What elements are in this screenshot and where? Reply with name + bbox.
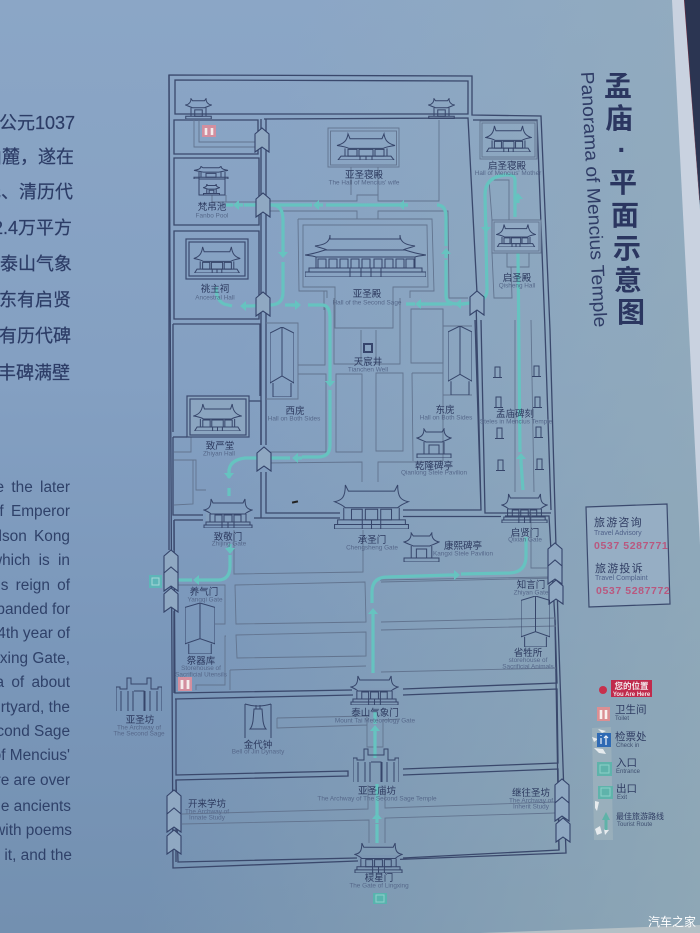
- Bell of Jin Dynasty: 金代钟: [244, 739, 272, 751]
- hall: Mencius' wife: The Hall of Mencius' wife: [329, 180, 400, 186]
- hall: Qisheng Hall: 启圣殿: [503, 272, 532, 284]
- left intro text: Chinese: 泰山气象: [0, 254, 72, 274]
- Archway of the Second Sage: The Second Sage: [113, 730, 165, 738]
- Archway of Innate Study: Innate Study: [189, 814, 226, 822]
- legend: check in: [597, 730, 647, 749]
- right edge: white frame strip and dark gap: [480, 0, 700, 933]
- legend: toilet: [597, 703, 646, 722]
- top corner pavilions: [186, 99, 454, 119]
- legend: tourist route: Tourist Route: [617, 822, 653, 828]
- Qianlong Stele Pavilion: [401, 429, 467, 476]
- legend: exit: Exit: [617, 795, 627, 801]
- panel: travel contact box: Travel Complaint: [595, 575, 648, 582]
- thin courtyard lines: [174, 120, 558, 843]
- Fanbo Pool: 梵帛池: [198, 201, 227, 213]
- Zhiyan Gate: [514, 579, 549, 596]
- legend: exit: [598, 782, 637, 801]
- panel: travel contact box: 0537 5287772: [596, 585, 670, 597]
- hall: Mencius' wife: [328, 128, 400, 186]
- hall: Qisheng Hall: [492, 220, 541, 290]
- legend: [592, 680, 664, 840]
- hall: Ancestral Hall: Ancestral Hall: [195, 294, 235, 302]
- Archway of the Second Sage: [113, 678, 165, 738]
- Bell of Jin Dynasty: [232, 704, 285, 756]
- watermark: 汽车之家: [648, 914, 696, 929]
- Steles in Mencius Temple: Steles in Mencius Temple: [480, 418, 553, 426]
- east side hall: [420, 326, 472, 422]
- Kangxi Stele Pavilion: Kangxi Stele Pavilion: [433, 550, 493, 558]
- Archway of Innate Study: [185, 798, 229, 822]
- legend: check in: 检票处: [615, 730, 647, 743]
- Yangqi Gate: [187, 586, 223, 604]
- Archway of the Second Sage: The Archway of: [117, 724, 161, 732]
- Kangxi Stele Pavilion: 康熙碑亭: [444, 540, 482, 552]
- Gate of Lingxing: The Gate of Lingxing: [349, 882, 409, 890]
- Zhijing Gate: [204, 499, 252, 548]
- Zhiyan Gate: Zhiyan Gate: [514, 590, 549, 596]
- Qixian Gate: [502, 494, 547, 544]
- panel: travel contact box: 旅游投诉: [595, 561, 644, 575]
- Qianlong Stele Pavilion: Qianlong Stele Pavilion: [401, 470, 467, 476]
- title: vertical Chinese: 示: [613, 233, 641, 264]
- Archway of Innate Study: The Archway of: [185, 808, 229, 816]
- panel: travel contact box: [586, 504, 670, 607]
- Zhijing Gate: 致敬门: [214, 531, 242, 543]
- Storehouse of Sacrificial Utensils: [175, 603, 227, 678]
- Gate of Lingxing: 棂星门: [365, 872, 393, 884]
- Archway of Innate Study: 开来学坊: [188, 798, 226, 810]
- legend: toilet: Toilet: [615, 716, 629, 722]
- toilet icon: south: [178, 677, 192, 691]
- legend: tourist route: [602, 811, 664, 830]
- left intro text: Chinese: 丰碑满壁: [0, 363, 70, 383]
- left intro text: Chinese: 公元1037: [0, 113, 75, 133]
- Storehouse of Sacrificial Animals: storehouse of: [509, 657, 548, 664]
- Archway of Inherit Study: The Archway of: [509, 798, 553, 804]
- title: vertical Chinese: 面: [611, 200, 639, 231]
- Yangqi Gate: 养气门: [190, 586, 218, 598]
- Storehouse of Sacrificial Animals: [502, 596, 554, 670]
- toilet icon: north: [202, 125, 216, 137]
- Kangxi Stele Pavilion: [404, 533, 493, 562]
- Bell of Jin Dynasty: Bell of Jin Dynasty: [232, 748, 285, 756]
- legend: entrance: [597, 757, 641, 776]
- legend: sticker patch: [592, 727, 613, 840]
- panel: site plan: [113, 75, 570, 904]
- Storehouse of Sacrificial Animals: Sacrificial Animals: [502, 664, 554, 670]
- Qianlong Stele Pavilion: 乾隆碑亭: [415, 460, 453, 472]
- hall: Mencius' Mother: [475, 121, 542, 177]
- Archway of Inherit Study: 继往圣坊: [512, 787, 550, 799]
- left intro text: Chinese: 有历代碑: [0, 326, 71, 346]
- Steles in Mencius Temple: 孟庙碑刻: [496, 408, 534, 420]
- left intro text: English: it, and the: [4, 847, 72, 864]
- title: vertical Chinese: 庙: [605, 103, 633, 134]
- left intro text: Chinese: [0, 113, 75, 383]
- legend: you are here: You Are Here: [613, 692, 651, 698]
- title: vertical Chinese: 孟: [604, 71, 632, 102]
- Zhiyan Hall: [187, 396, 249, 458]
- Mount Tai Meteorology Gate: Mount Tai Meteorology Gate: [335, 718, 416, 724]
- title: vertical Chinese: 平: [609, 167, 637, 198]
- legend: toilet: 卫生间: [615, 703, 646, 716]
- main hall: Hall of the Second Sage: Hall of the Second Sage: [333, 300, 402, 306]
- hall: Mencius' Mother: 启圣寝殿: [488, 160, 526, 172]
- Yangqi Gate: Yangqi Gate: [187, 596, 223, 604]
- main hall: Hall of the Second Sage: [305, 235, 426, 306]
- legend: entrance: Entrance: [616, 769, 641, 775]
- Zhiyan Hall: Zhiyan Hall: [203, 450, 235, 458]
- hall: Ancestral Hall: [186, 239, 248, 302]
- hall: Qisheng Hall: Qisheng Hall: [499, 282, 535, 290]
- title: vertical Chinese: 图: [617, 297, 645, 328]
- Tianchen Well: 天宸井: [354, 356, 382, 368]
- left intro text: Chinese: 东有启贤: [0, 290, 71, 310]
- Fanbo Pool: Fanbo Pool: [196, 212, 228, 220]
- title: vertical Chinese: ·: [617, 134, 627, 165]
- west side hall: 西庑: [285, 405, 305, 417]
- Archway of the Second Sage Temple: 亚圣庙坊: [358, 785, 396, 797]
- Archway of the Second Sage Temple: The Archway of The Second Sage Temple: [317, 796, 437, 802]
- legend: check in: Check in: [616, 743, 639, 749]
- panel: travel contact box: 旅游咨询: [594, 515, 643, 529]
- Archway of the Second Sage: 亚圣坊: [126, 714, 155, 726]
- legend: entrance: 入口: [616, 757, 637, 769]
- Chengsheng Gate: Chengsheng Gate: [346, 544, 398, 552]
- Archway of the Second Sage Temple: [317, 749, 437, 802]
- Steles in Mencius Temple: [480, 366, 553, 470]
- entrance icon on map: [373, 893, 387, 904]
- hall: Ancestral Hall: 祧主祠: [201, 283, 229, 295]
- legend: exit: 出口: [616, 782, 637, 795]
- small black speck: [292, 500, 298, 504]
- title: vertical Chinese: [604, 71, 645, 328]
- Mount Tai Meteorology Gate: [335, 676, 416, 724]
- hall: Mencius' Mother: Hall of Mencius' Mother: [475, 170, 542, 177]
- Zhijing Gate: Zhijing Gate: [212, 540, 247, 548]
- Tianchen Well: Tianchen Well: [348, 366, 388, 374]
- Zhiyan Gate: 知言门: [517, 579, 545, 591]
- title: English rotated: Panorama of Mencius Temple: [577, 71, 611, 328]
- legend: tourist route: 最佳旅游路线: [616, 811, 664, 821]
- Chengsheng Gate: [335, 485, 408, 552]
- legend: you are here: 您的位置: [614, 681, 649, 691]
- hall: Mencius' wife: 亚圣寝殿: [345, 169, 383, 181]
- Tianchen Well: [348, 344, 388, 374]
- exit icon on map: [149, 575, 162, 588]
- Storehouse of Sacrificial Utensils: 祭器库: [187, 655, 216, 667]
- Qixian Gate: 启贤门: [511, 527, 539, 539]
- tourist route: [178, 175, 526, 843]
- Storehouse of Sacrificial Utensils: Sacrificial Utensils: [175, 672, 227, 678]
- panel: travel contact box: 0537 5287771: [594, 540, 668, 552]
- main hall: Hall of the Second Sage: 亚圣殿: [353, 289, 382, 300]
- Mount Tai Meteorology Gate: 泰山气象门: [351, 707, 399, 719]
- Storehouse of Sacrificial Utensils: Storehouse of: [181, 665, 221, 672]
- west side hall: [268, 327, 320, 422]
- Gate of Lingxing: [349, 843, 409, 890]
- legend: you are here: [599, 680, 652, 698]
- Archway of Inherit Study: Inherit Study: [513, 804, 550, 810]
- outer and main walls: [169, 75, 566, 868]
- east side hall: 东庑: [435, 404, 455, 416]
- Qixian Gate: Qixian Gate: [508, 536, 542, 544]
- Fanbo Pool: [194, 166, 228, 220]
- west side hall: Hall on Both Sides: [268, 416, 320, 422]
- east side hall: Hall on Both Sides: [420, 414, 472, 422]
- Zhiyan Hall: 致严堂: [206, 440, 234, 452]
- Chengsheng Gate: 承圣门: [358, 534, 386, 546]
- left intro text: English: [0, 479, 72, 864]
- panel: travel contact box: Travel Advisory: [594, 530, 642, 537]
- wall gate chevrons: [164, 128, 570, 854]
- title: vertical Chinese: 意: [614, 265, 642, 296]
- Archway of Inherit Study: [509, 787, 553, 810]
- Storehouse of Sacrificial Animals: 省牲所: [514, 647, 543, 659]
